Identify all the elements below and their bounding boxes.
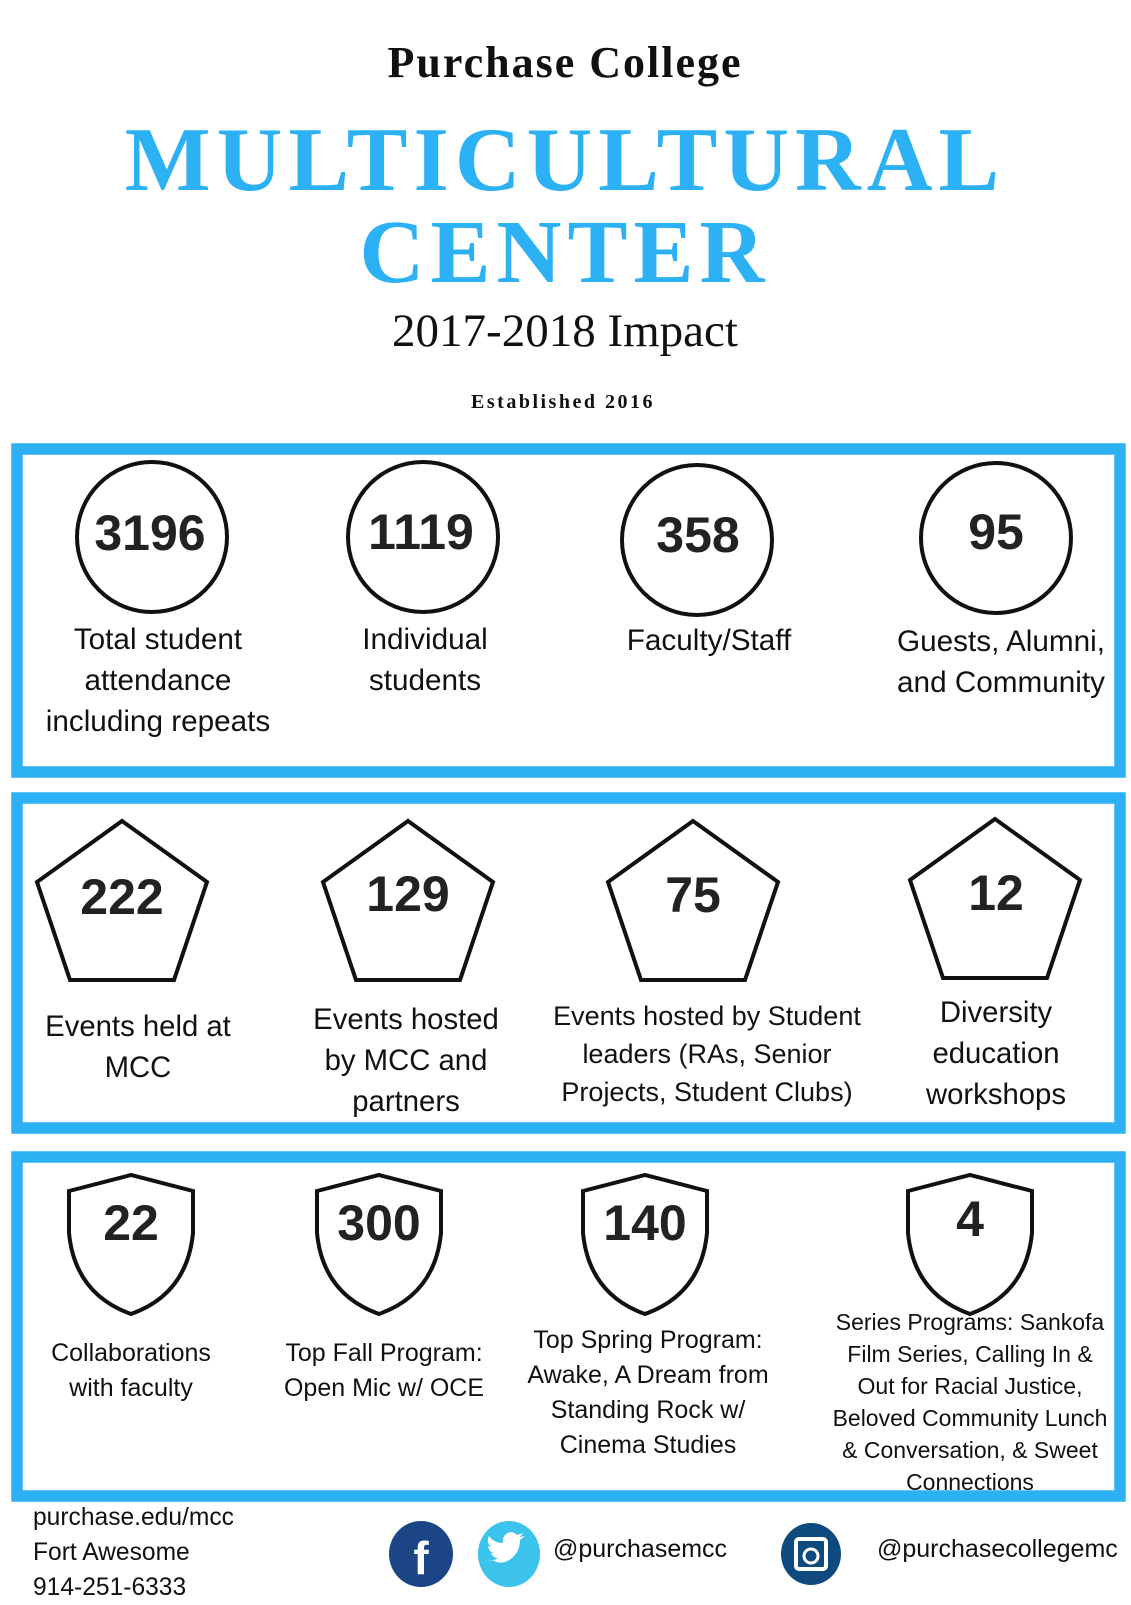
- stat: 300: [284, 1175, 484, 1402]
- footer contact: Fort Awesome: [33, 1539, 190, 1566]
- stat: 4: Beloved Community Lunch: [833, 1405, 1107, 1431]
- stat: 95: [897, 463, 1105, 699]
- stat: 129: Events hosted: [313, 1003, 499, 1036]
- footer contact: [33, 1504, 234, 1601]
- stat: 300: Top Fall Program:: [285, 1339, 483, 1367]
- stat: 12: workshops: [925, 1078, 1066, 1111]
- stat: 75: Projects, Student Clubs): [561, 1077, 853, 1107]
- stat: 95: Guests, Alumni,: [897, 625, 1105, 658]
- stat: 358: Faculty/Staff: [627, 624, 792, 657]
- stat: 12: [910, 819, 1080, 1111]
- title: MULTICULTURAL CENTER: CENTER: [359, 203, 771, 302]
- stat: 1119: Individual: [362, 623, 488, 656]
- icon: twitter: [478, 1521, 540, 1587]
- stat: 3196: [46, 462, 270, 738]
- stat: 22: 22: [103, 1195, 159, 1251]
- stat: 1119: students: [369, 664, 481, 697]
- instagram handle: @purchasecollegemc: [877, 1535, 1118, 1563]
- icon: facebook: f: [413, 1532, 429, 1584]
- panel: events: [17, 798, 1120, 1128]
- stat: 95: and Community: [897, 666, 1105, 699]
- footer contact: purchase.edu/mcc: [33, 1504, 234, 1531]
- stat: 75: [553, 821, 861, 1107]
- stat: 129: by MCC and: [325, 1044, 487, 1077]
- stat: 12: 12: [968, 865, 1024, 921]
- stat: 140: Standing Rock w/: [551, 1396, 745, 1424]
- panel: attendance: [17, 449, 1120, 772]
- title: MULTICULTURAL CENTER: MULTICULTURAL: [125, 109, 1005, 210]
- subtitle: impact year: 2017-2018 Impact: [392, 305, 738, 357]
- stat: 222: 222: [80, 869, 164, 925]
- stat: 222: MCC: [105, 1051, 171, 1084]
- stat: 1119: 1119: [368, 504, 474, 560]
- stat: 4: & Conversation, & Sweet: [842, 1437, 1098, 1463]
- stat: 4: Connections: [906, 1469, 1034, 1495]
- stat: 129: partners: [352, 1085, 460, 1118]
- stat: 95: 95: [968, 504, 1024, 560]
- stat: 22: Collaborations: [51, 1339, 211, 1367]
- stat: 140: [527, 1175, 769, 1459]
- stat: 140: Top Spring Program:: [533, 1326, 763, 1354]
- stat: 12: education: [932, 1037, 1060, 1070]
- stat: 222: Events held at: [45, 1010, 231, 1043]
- stat: 22: [51, 1175, 211, 1402]
- stat: 3196: Total student: [74, 623, 243, 656]
- stat: 75: 75: [665, 867, 721, 923]
- stat: 4: [833, 1175, 1107, 1495]
- stat: 4: Film Series, Calling In &: [847, 1341, 1093, 1367]
- panel: programs: [17, 1157, 1120, 1496]
- stat: 129: 129: [366, 866, 450, 922]
- title: Purchase College: Purchase College: [387, 38, 743, 87]
- stat: 4: Series Programs: Sankofa: [836, 1309, 1104, 1335]
- stat: 22: with faculty: [68, 1374, 193, 1402]
- twitter handle: @purchasemcc: [553, 1535, 727, 1563]
- stat: 75: Events hosted by Student: [553, 1001, 861, 1031]
- stat: 300: Open Mic w/ OCE: [284, 1374, 484, 1402]
- stat: 3196: attendance: [85, 664, 231, 697]
- stat: 4: 4: [956, 1191, 984, 1247]
- icon: facebook: [389, 1521, 453, 1587]
- stat: 3196: 3196: [94, 505, 206, 561]
- title: MULTICULTURAL CENTER: [125, 109, 1005, 302]
- icon: instagram: [781, 1523, 841, 1585]
- stat: 358: 358: [656, 507, 740, 563]
- stat: 4: Out for Racial Justice,: [858, 1373, 1082, 1399]
- stat: 140: Cinema Studies: [560, 1431, 736, 1459]
- stat: 300: 300: [337, 1195, 421, 1251]
- stat: 222: [37, 821, 231, 1084]
- established: Established 2016: [471, 391, 655, 413]
- stat: 3196: including repeats: [46, 705, 270, 738]
- stat: 140: Awake, A Dream from: [527, 1361, 769, 1389]
- stat: 129: [313, 821, 499, 1118]
- stat: 140: 140: [603, 1195, 687, 1251]
- stat: 1119: [348, 462, 498, 697]
- stat: 358: [622, 465, 792, 657]
- stat: 12: Diversity: [940, 996, 1053, 1029]
- stat: 75: leaders (RAs, Senior: [582, 1039, 832, 1069]
